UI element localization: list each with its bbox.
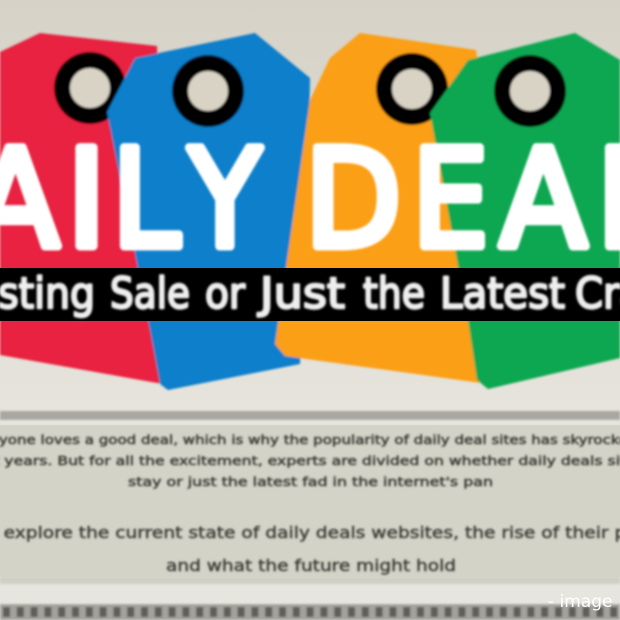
top divider band — [0, 411, 620, 425]
subtitle banner: or — [205, 269, 245, 319]
subtitle banner: Latest — [440, 269, 565, 319]
title: I — [67, 121, 106, 278]
explore statement — [0, 523, 620, 575]
intro panel — [0, 425, 620, 577]
tag illustrations — [0, 33, 620, 390]
subtitle banner: Sale — [110, 269, 190, 319]
subtitle banner — [0, 268, 620, 321]
subtitle banner: Just — [257, 269, 345, 319]
watermark: - image — [548, 592, 612, 612]
icon: green price tag — [430, 33, 620, 389]
title: L — [112, 121, 180, 278]
icon: blue price tag — [107, 33, 310, 390]
title: E — [412, 121, 489, 278]
intro paragraph — [0, 432, 620, 489]
intro paragraph: stay or just the latest fad in the internet's pan — [128, 474, 493, 489]
title — [0, 121, 620, 278]
icon: orange price tag — [275, 33, 500, 383]
bottom divider band — [0, 577, 620, 620]
explore statement: and what the future might hold — [166, 556, 456, 575]
subtitle banner: the — [363, 269, 425, 319]
title: D — [305, 121, 401, 278]
title: Y — [188, 121, 261, 278]
icon: small red tag at right edge — [597, 320, 620, 358]
title: A — [500, 121, 587, 278]
icon: red price tag — [0, 33, 170, 384]
